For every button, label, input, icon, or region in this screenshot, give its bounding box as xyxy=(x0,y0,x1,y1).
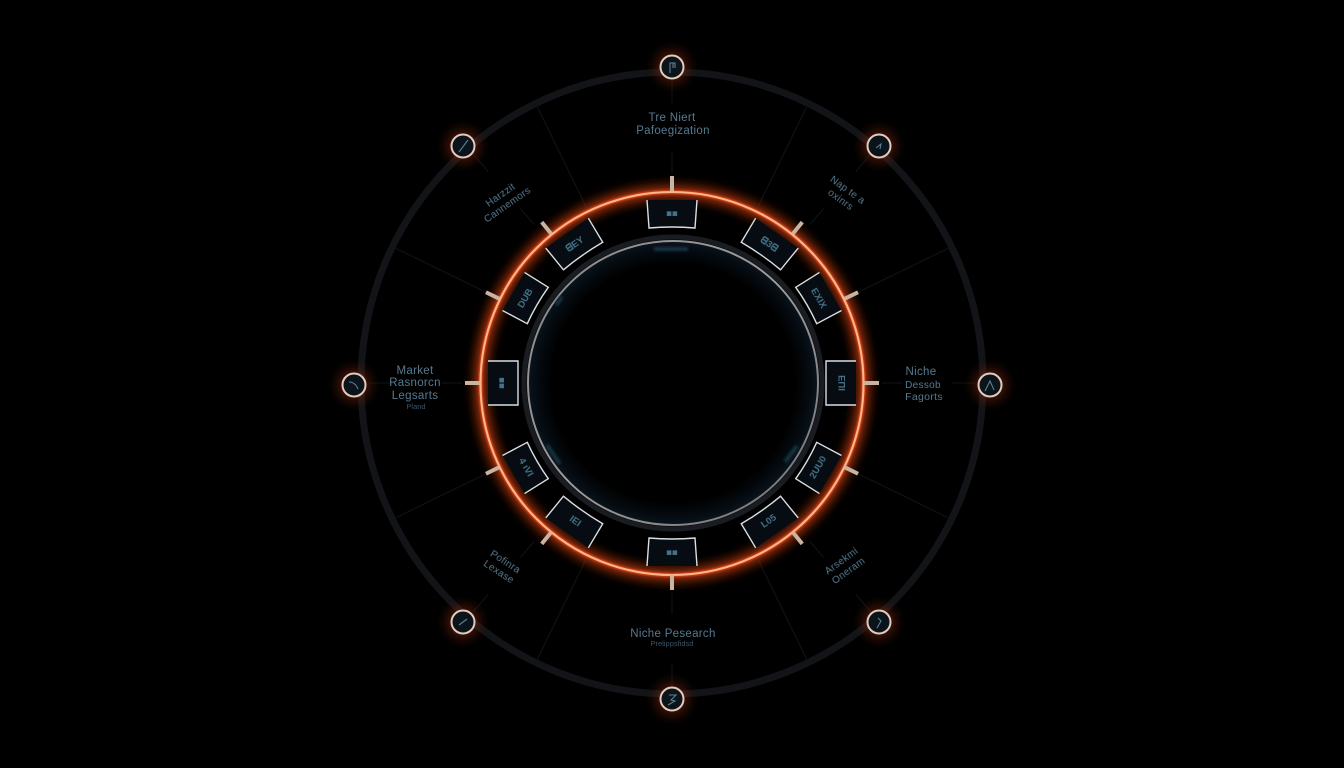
box: left: ■■ xyxy=(496,377,508,389)
node connector lines xyxy=(369,80,975,686)
box: lower right 2: L05 xyxy=(759,512,779,531)
box: left xyxy=(488,361,518,405)
label: top: Tre Niert xyxy=(648,112,696,124)
box: upper left 2 xyxy=(546,218,604,271)
label: left: Market xyxy=(397,365,434,377)
label: upper right xyxy=(821,174,867,217)
label: left: Rasnorcn xyxy=(389,377,441,389)
label: lower left: Pofinra xyxy=(488,549,522,576)
box: right xyxy=(826,361,856,405)
label: right: Dessob xyxy=(905,380,941,391)
box: bottom xyxy=(647,538,697,566)
box: lower left 2: IEI xyxy=(567,514,583,529)
label: right xyxy=(905,366,943,403)
box: upper right 2 xyxy=(795,272,841,325)
label: lower left: Lexase xyxy=(481,559,516,586)
label: bottom: Prelippsfidsd xyxy=(651,639,693,648)
glowing orange ring xyxy=(480,192,864,575)
node: right xyxy=(963,358,1017,412)
label: bottom xyxy=(630,628,716,648)
box: upper right 2: EXIX xyxy=(808,286,829,311)
box: lower left 2 xyxy=(546,495,604,548)
box: bottom: ■■ xyxy=(666,548,678,558)
label: lower right: Arsekmi xyxy=(823,546,860,577)
label: top xyxy=(636,112,710,137)
node: lower left xyxy=(436,595,490,649)
box: lower right 1: 2UU0 xyxy=(808,454,829,481)
label: upper right: Nap te a xyxy=(828,174,867,207)
label: lower left xyxy=(481,549,522,586)
label: right: Fagorts xyxy=(905,391,943,403)
label: right: Niche xyxy=(906,366,936,378)
central dark lens xyxy=(524,237,822,529)
box: upper right 1: ᗺ3ᗺ xyxy=(758,234,781,255)
box: upper right 1 xyxy=(740,218,798,271)
label: top: Pafoegization xyxy=(636,125,710,137)
box: lower right 1 xyxy=(795,441,841,494)
box: lower left 1: 4 ıVI xyxy=(516,456,535,479)
node: upper right xyxy=(852,119,906,173)
node: left xyxy=(327,358,381,412)
outer ring xyxy=(361,72,983,694)
sector spokes xyxy=(396,107,948,659)
label: upper left: Harzzit xyxy=(484,181,518,210)
label: left xyxy=(389,365,441,411)
label: lower right xyxy=(823,546,868,587)
box: lower left 1 xyxy=(503,441,549,494)
label: upper left: Cannemors xyxy=(482,185,533,225)
box: top: ■■ xyxy=(666,208,678,220)
box: top xyxy=(647,200,697,228)
node: bottom xyxy=(645,672,699,726)
label: lower right: Oneram xyxy=(830,556,867,587)
node: top xyxy=(645,40,699,94)
label: upper right: oxinrs xyxy=(825,187,855,213)
step boxes xyxy=(488,200,856,566)
box: right: EΠI xyxy=(836,375,846,391)
label: left: Legsarts xyxy=(392,390,438,402)
box: upper left 1 xyxy=(503,272,549,325)
box: upper left 1: DUB xyxy=(516,287,536,310)
label: bottom: Niche Pesearch xyxy=(630,628,716,640)
node: upper left xyxy=(436,119,490,173)
node: lower right xyxy=(852,595,906,649)
outer nodes xyxy=(327,40,1017,726)
ring ticks xyxy=(465,176,879,590)
box: upper left 2: ᗺEY xyxy=(563,233,587,255)
box: lower right 2 xyxy=(740,495,798,548)
label: left: Pland xyxy=(406,402,426,411)
